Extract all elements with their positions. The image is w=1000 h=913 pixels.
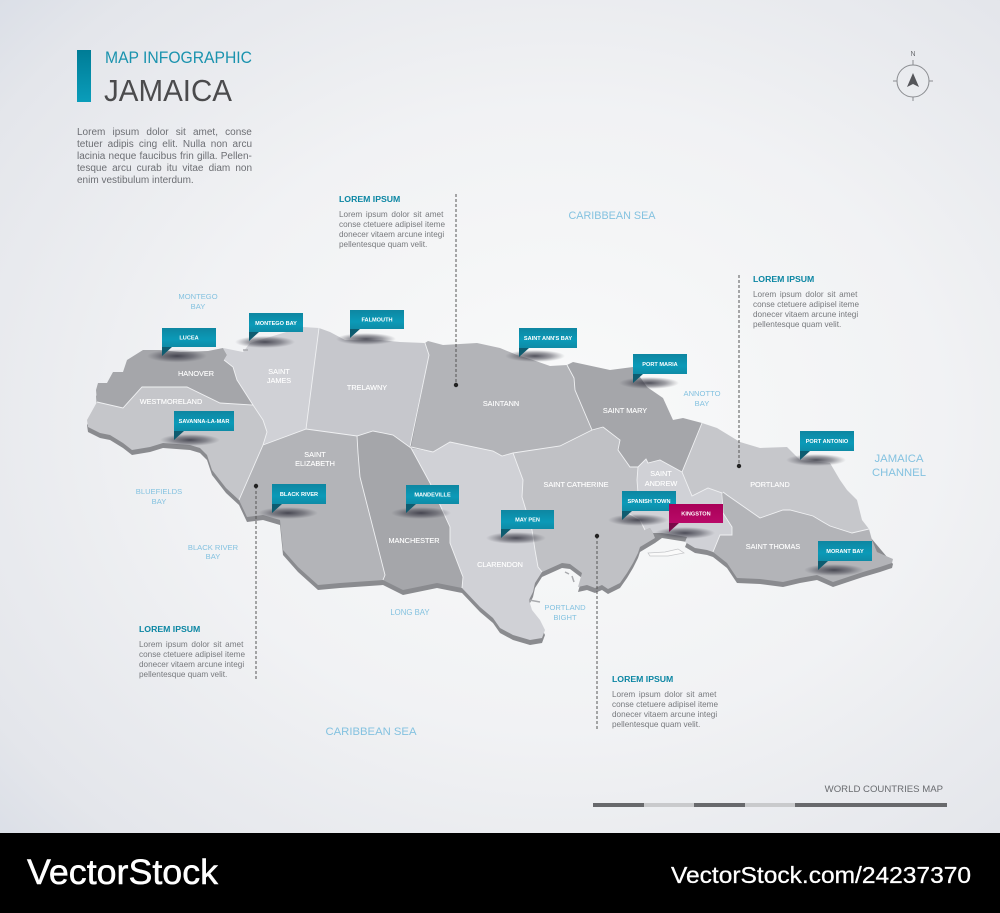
callout: bottom centre: pellentesque quam velit. bbox=[612, 720, 700, 729]
sea and bay labels: CARIBBEAN SEA bbox=[568, 210, 656, 222]
sea and bay labels: BAY bbox=[206, 552, 220, 561]
region labels: SAINT MARY bbox=[603, 406, 647, 415]
sea and bay labels: BLUEFIELDS bbox=[136, 487, 182, 496]
pin: May Pen: MAY PEN bbox=[515, 518, 540, 524]
callout: bottom left: conse ctetuere adipisel iteme bbox=[139, 650, 245, 659]
title: JAMAICA bbox=[104, 73, 232, 108]
callout: top centre: Lorem ipsum dolor sit amet bbox=[339, 210, 444, 219]
pin: Spanish Town: SPANISH TOWN bbox=[628, 499, 670, 505]
pin: Falmouth bbox=[336, 310, 404, 345]
region labels: SAINT THOMAS bbox=[746, 542, 800, 551]
pin: Savanna-la-Mar: SAVANNA-LA-MAR bbox=[179, 419, 229, 425]
pin: Morant Bay bbox=[804, 541, 872, 576]
callout: bottom left: LOREM IPSUM bbox=[139, 624, 200, 634]
callout: right bbox=[737, 274, 859, 468]
sea and bay labels bbox=[136, 210, 926, 738]
callout: bottom centre: donecer vitaem arcune integi bbox=[612, 710, 717, 719]
region labels: JAMES bbox=[267, 376, 291, 385]
region labels: SAINT bbox=[268, 367, 290, 376]
pin: Port Maria bbox=[619, 354, 687, 389]
region: Clarendon bbox=[411, 442, 545, 640]
coastal inlets bbox=[243, 350, 574, 602]
pin: Black River: BLACK RIVER bbox=[280, 492, 318, 498]
region labels: MANCHESTER bbox=[388, 536, 440, 545]
callout: right: pellentesque quam velit. bbox=[753, 320, 841, 329]
pin: Port Antonio bbox=[786, 431, 854, 466]
region: Saint Mary bbox=[567, 362, 702, 472]
region labels: WESTMORELAND bbox=[140, 397, 202, 406]
sea and bay labels: PORTLAND bbox=[544, 603, 586, 612]
pin: Mandeville bbox=[391, 485, 459, 519]
intro paragraph: enim vestibulum interdum. bbox=[77, 175, 194, 186]
callout: top centre bbox=[339, 194, 458, 387]
pin: May Pen bbox=[486, 510, 554, 544]
region labels: HANOVER bbox=[178, 369, 214, 378]
region: Saint Catherine bbox=[513, 427, 655, 589]
sea and bay labels: CHANNEL bbox=[872, 467, 926, 479]
callout: bottom centre: LOREM IPSUM bbox=[612, 674, 673, 684]
region labels: CLARENDON bbox=[477, 560, 523, 569]
pin: Kingston: KINGSTON bbox=[681, 512, 711, 518]
region labels bbox=[140, 367, 800, 569]
region: Saint Ann bbox=[411, 341, 592, 456]
intro paragraph: lacinia neque faucibus frin gilla. Pellen- bbox=[77, 151, 252, 162]
pin: Falmouth: FALMOUTH bbox=[361, 318, 393, 324]
region labels: TRELAWNY bbox=[347, 383, 387, 392]
pin: Kingston bbox=[655, 504, 723, 539]
scale bar bbox=[593, 803, 947, 807]
sea and bay labels: BAY bbox=[191, 302, 205, 311]
region: Trelawny bbox=[306, 328, 429, 447]
region labels: ANDREW bbox=[645, 479, 677, 488]
sea and bay labels: MONTEGO bbox=[178, 292, 218, 301]
region labels: ELIZABETH bbox=[295, 459, 335, 468]
sea and bay labels: LONG BAY bbox=[390, 608, 430, 617]
intro paragraph: tetuer adipis cing elit. Nulla non arcu bbox=[77, 139, 252, 150]
pin: Morant Bay: MORANT BAY bbox=[826, 549, 864, 555]
callout: bottom centre bbox=[595, 534, 718, 730]
sea and bay labels: BIGHT bbox=[553, 613, 577, 622]
region labels: SAINTANN bbox=[483, 399, 519, 408]
callout: right: LOREM IPSUM bbox=[753, 274, 814, 284]
credit caption: WORLD COUNTRIES MAP bbox=[825, 784, 943, 795]
callout: top centre: LOREM IPSUM bbox=[339, 194, 400, 204]
callout: bottom left: Lorem ipsum dolor sit amet bbox=[139, 640, 244, 649]
callout: right: donecer vitaem arcune integi bbox=[753, 310, 858, 319]
footer band: VectorStock.com/24237370 bbox=[671, 862, 971, 888]
footer band: VectorStock bbox=[27, 853, 219, 892]
region labels: SAINT bbox=[650, 469, 672, 478]
map extrusion shadow bbox=[87, 345, 893, 645]
region: Portland bbox=[682, 423, 869, 533]
pin: Black River bbox=[258, 484, 326, 519]
icon: compass: N bbox=[910, 51, 916, 58]
region labels: PORTLAND bbox=[750, 480, 790, 489]
region: Saint Elizabeth bbox=[239, 429, 385, 585]
sea and bay labels: JAMAICA bbox=[875, 453, 924, 465]
region: Manchester bbox=[357, 431, 463, 590]
region: Saint James bbox=[223, 327, 319, 445]
pin: Port Antonio: PORT ANTONIO bbox=[806, 439, 849, 445]
callout: bottom centre: conse ctetuere adipisel iteme bbox=[612, 700, 718, 709]
sea and bay labels: ANNOTTO bbox=[684, 389, 721, 398]
footer band bbox=[0, 833, 1000, 913]
callout: top centre: conse ctetuere adipisel iteme bbox=[339, 220, 445, 229]
pin: Port Maria: PORT MARIA bbox=[642, 362, 678, 368]
intro paragraph: Lorem ipsum dolor sit amet, conse bbox=[77, 127, 252, 138]
title accent bar bbox=[77, 50, 91, 102]
pin: Lucea bbox=[147, 328, 216, 362]
Kingston harbour spit bbox=[648, 549, 684, 556]
sea and bay labels: BLACK RIVER bbox=[188, 543, 239, 552]
icon: compass bbox=[893, 51, 933, 101]
callout: top centre: donecer vitaem arcune integi bbox=[339, 230, 444, 239]
pin: Savanna-la-Mar bbox=[160, 411, 234, 446]
region: Hanover bbox=[96, 348, 253, 408]
callout: right: Lorem ipsum dolor sit amet bbox=[753, 290, 858, 299]
title block bbox=[77, 49, 252, 108]
callout: bottom centre: Lorem ipsum dolor sit amet bbox=[612, 690, 717, 699]
pin: Montego Bay bbox=[235, 313, 303, 348]
sea and bay labels: BAY bbox=[152, 497, 166, 506]
callout: bottom left bbox=[139, 484, 258, 680]
pin: Spanish Town bbox=[608, 491, 676, 526]
pin: Saint Ann's Bay bbox=[505, 328, 577, 362]
callout: bottom left: pellentesque quam velit. bbox=[139, 670, 227, 679]
region labels: SAINT bbox=[304, 450, 326, 459]
callout: bottom left: donecer vitaem arcune integi bbox=[139, 660, 244, 669]
pin: Montego Bay: MONTEGO BAY bbox=[255, 321, 297, 327]
pin: Saint Ann's Bay: SAINT ANN'S BAY bbox=[524, 336, 572, 342]
subtitle: MAP INFOGRAPHIC bbox=[105, 49, 252, 67]
map: island of Jamaica bbox=[87, 327, 893, 645]
pin: Lucea: LUCEA bbox=[179, 336, 199, 342]
intro paragraph bbox=[77, 127, 252, 186]
region labels: SAINT CATHERINE bbox=[543, 480, 609, 489]
sea and bay labels: BAY bbox=[695, 399, 709, 408]
intro paragraph: tesque arcu curab itu vitae diam non bbox=[77, 163, 252, 174]
region borders bbox=[97, 328, 869, 588]
callout: top centre: pellentesque quam velit. bbox=[339, 240, 427, 249]
region: Saint Andrew bbox=[628, 459, 732, 552]
region: Westmoreland bbox=[87, 387, 267, 500]
region: Saint Thomas bbox=[713, 492, 893, 582]
sea and bay labels: CARIBBEAN SEA bbox=[325, 726, 417, 738]
pin: Mandeville: MANDEVILLE bbox=[414, 492, 451, 498]
callout: right: conse ctetuere adipisel iteme bbox=[753, 300, 859, 309]
